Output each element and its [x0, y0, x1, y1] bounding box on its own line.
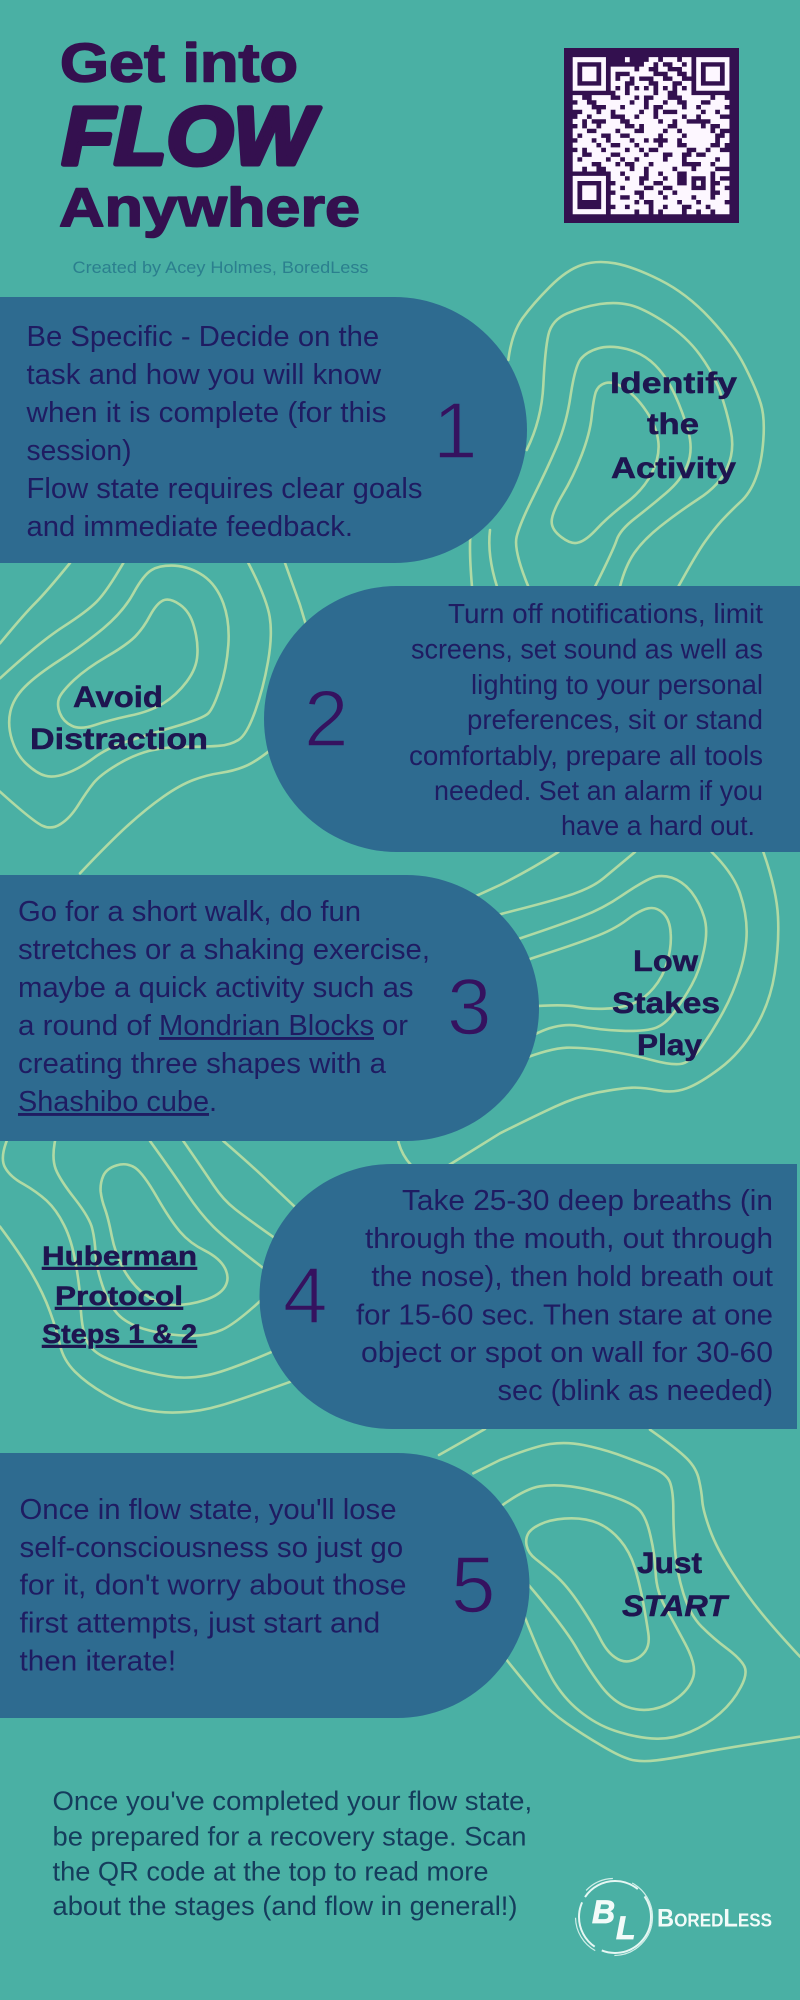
heading: Huberman Protocol Steps 1 & 2: Huberman: [42, 1241, 197, 1271]
step 1 text: Flow state requires clear goals: [26, 473, 422, 505]
heading: Identify the Activity: [610, 367, 737, 485]
closing note: [52, 1786, 532, 1921]
step 3 text: maybe a quick activity such as: [18, 972, 414, 1004]
step 4 text: object or spot on wall for 30-60: [361, 1337, 773, 1369]
heading: Just START: [622, 1547, 730, 1623]
step 2 text: have a hard out.: [561, 810, 755, 841]
step 1 text: task and how you will know: [26, 359, 382, 391]
step 5 text: Once in flow state, you'll lose: [20, 1494, 396, 1526]
heading: Identify the Activity: Activity: [611, 452, 736, 485]
step 3 text: .: [209, 1086, 217, 1118]
heading: Identify the Activity: the: [647, 408, 699, 441]
step 3 text: Mondrian Blocks: [159, 1010, 374, 1042]
step 4 text: through the mouth, out through: [365, 1223, 773, 1255]
logo: BoredLess: L: [616, 1910, 636, 1946]
step 5 text: then iterate!: [20, 1646, 176, 1678]
step 3 text: Go for a short walk, do fun: [18, 896, 361, 928]
step 4 text: [356, 1185, 773, 1407]
step 2 text: lighting to your personal: [471, 669, 763, 700]
step 3 text: a round of: [18, 1010, 152, 1042]
title: brush word FLOW: FLOW: [62, 91, 321, 182]
closing note: be prepared for a recovery stage. Scan: [52, 1822, 526, 1852]
step 1 text: Be Specific - Decide on the: [26, 321, 379, 353]
contour lines: left of step 2: [0, 563, 315, 873]
heading: Avoid Distraction: [30, 681, 208, 756]
panel: step 1: [0, 297, 527, 563]
step 3 text: stretches or a shaking exercise,: [18, 934, 430, 966]
title: [59, 32, 360, 238]
contour lines: right of step 3: [398, 852, 778, 1165]
heading: Low Stakes Play: Stakes: [612, 987, 720, 1020]
contour lines: top right: [470, 262, 764, 587]
step 1 text: and immediate feedback.: [26, 511, 353, 543]
step 2 text: screens, set sound as well as: [411, 634, 763, 664]
heading: Avoid Distraction: Avoid: [73, 681, 163, 714]
panel: step 4: [260, 1164, 797, 1429]
closing note: about the stages (and flow in general!): [52, 1891, 518, 1921]
panel: step 3: [0, 875, 539, 1141]
step 2 text: comfortably, prepare all tools: [409, 740, 763, 771]
panel: step 5: [0, 1453, 530, 1718]
step 4 text: sec (blink as needed): [498, 1375, 773, 1407]
step 1 text: session): [26, 435, 132, 467]
step 3 number: 3: [447, 962, 492, 1051]
heading: Low Stakes Play: [612, 945, 720, 1062]
step 5 number: 5: [451, 1540, 496, 1629]
heading: Just START: Just: [637, 1547, 702, 1580]
heading: Low Stakes Play: Low: [633, 945, 699, 978]
title: Get into: [60, 32, 298, 94]
step 2 text: [409, 598, 763, 841]
heading: Huberman Protocol Steps 1 & 2: [42, 1241, 197, 1349]
step 2 text: Turn off notifications, limit: [448, 598, 763, 629]
step 2 text: preferences, sit or stand: [467, 704, 763, 735]
heading: Avoid Distraction: Distraction: [30, 723, 208, 756]
step 2 number: 2: [304, 674, 348, 763]
logo: BoredLess: BoredLess: [657, 1904, 772, 1932]
heading: Identify the Activity: Identify: [610, 367, 737, 400]
QR code: [564, 48, 739, 223]
step 5 text: self-consciousness so just go: [20, 1532, 403, 1564]
step 4 number: 4: [283, 1251, 328, 1340]
logo: BoredLess: B: [592, 1894, 615, 1930]
step 4 text: Take 25-30 deep breaths (in: [402, 1185, 773, 1217]
contour lines: left of step 4: [0, 1141, 300, 1413]
heading: Huberman Protocol Steps 1 & 2: Protocol: [55, 1281, 183, 1311]
heading: Low Stakes Play: Play: [637, 1029, 702, 1062]
title: Anywhere: [59, 176, 360, 238]
step 3 text: [18, 896, 430, 1118]
contour lines: right of step 5: [439, 1429, 800, 1761]
step 5 text: first attempts, just start and: [20, 1608, 380, 1640]
step 5 text: [20, 1494, 406, 1678]
step 3 text: or: [382, 1010, 408, 1042]
step 3 text: Shashibo cube: [18, 1086, 209, 1118]
closing note: Once you've completed your flow state,: [52, 1786, 532, 1816]
step 1 number: 1: [433, 386, 478, 475]
step 5 text: for it, don't worry about those: [20, 1570, 406, 1602]
step 3 text: creating three shapes with a: [18, 1048, 387, 1080]
credit line: Created by Acey Holmes, BoredLess: [72, 258, 368, 277]
closing note: the QR code at the top to read more: [52, 1856, 488, 1886]
heading: Just START: START: [622, 1590, 730, 1623]
heading: Huberman Protocol Steps 1 & 2: Steps 1 & 2: [42, 1319, 197, 1349]
logo: BoredLess: [576, 1878, 772, 1956]
step 1 text: [25, 321, 423, 543]
step 4 text: for 15-60 sec. Then stare at one: [356, 1300, 773, 1332]
step 4 text: the nose), then hold breath out: [371, 1261, 773, 1293]
step 1 text: when it is complete (for this: [25, 397, 387, 429]
step 2 text: needed. Set an alarm if you: [434, 775, 763, 806]
panel: step 2: [264, 586, 800, 852]
